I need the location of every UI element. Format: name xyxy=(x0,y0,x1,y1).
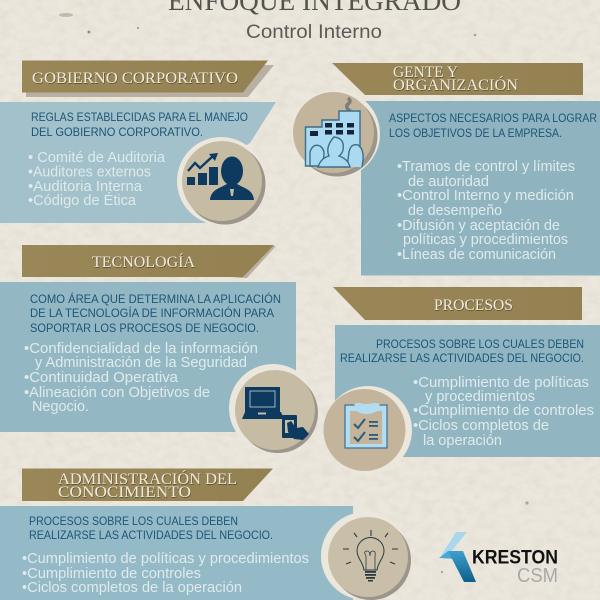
icon: laptop and tablet xyxy=(229,364,318,453)
panel background xyxy=(0,506,353,600)
intro text: LOS OBJETIVOS DE LA EMPRESA. xyxy=(389,126,562,140)
bullet list xyxy=(28,149,166,209)
logo wordmark: KRESTON xyxy=(472,546,558,568)
icon: checklist clipboard xyxy=(324,386,412,474)
bullet list: y Administración de la Seguridad xyxy=(35,354,247,371)
intro text xyxy=(340,337,584,365)
bullet list: •Líneas de comunicación xyxy=(397,246,556,263)
heading: ORGANIZACIÓN xyxy=(393,77,518,94)
bullet list: •Alineación con Objetivos de xyxy=(24,384,210,401)
heading: GENTE Y xyxy=(393,64,458,81)
bullet list: políticas y procedimientos xyxy=(403,231,568,248)
intro text: PROCESOS SOBRE LOS CUALES DEBEN xyxy=(29,514,238,528)
bullet list xyxy=(22,550,309,596)
intro text: REALIZARSE LAS ACTIVIDADES DEL NEGOCIO. xyxy=(29,528,273,542)
banner shadow xyxy=(26,246,276,278)
panel background xyxy=(0,102,276,223)
bullet list: •Auditores externos xyxy=(28,164,151,180)
bullet list: •Confidencialidad de la información xyxy=(24,340,258,357)
panel background xyxy=(335,325,600,457)
heading: PROCESOS xyxy=(434,297,513,314)
panel: procesos xyxy=(324,287,600,474)
intro text: REGLAS ESTABLECIDAS PARA EL MANEJO xyxy=(31,110,248,124)
banner xyxy=(332,63,583,95)
bullet list: •Auditoria Interna xyxy=(28,178,143,195)
logo: Kreston CSM xyxy=(439,532,558,587)
icon: chart and executive xyxy=(177,137,266,225)
logo mark xyxy=(439,532,476,582)
heading: TECNOLOGÍA xyxy=(92,254,196,271)
intro text: DE LA TECNOLOGÍA DE INFORMACIÓN PARA xyxy=(30,305,274,320)
intro text xyxy=(29,514,273,542)
bullet list: •Control Interno y medición xyxy=(397,187,574,204)
bullet list: •Continuidad Operativa xyxy=(24,369,179,386)
subtitle: Control Interno xyxy=(246,22,382,43)
panel: gente y organizacion xyxy=(292,63,600,276)
bullet list: •Ciclos completos de xyxy=(413,417,549,434)
heading xyxy=(393,64,518,94)
bullet list: Negocio. xyxy=(32,398,89,415)
heading: CONOCIMIENTO xyxy=(58,484,191,501)
banner xyxy=(22,468,273,501)
bullet list: •Código de Ética xyxy=(28,192,137,209)
bullet list: •Cumplimiento de controles xyxy=(413,402,594,419)
intro text: SOPORTAR LOS PROCESOS DE NEGOCIO. xyxy=(30,321,259,335)
banner xyxy=(22,245,274,277)
bullet list: de autoridad xyxy=(408,173,489,190)
bullet list: •Ciclos completos de la operación xyxy=(22,579,242,596)
bullet list: •Cumplimiento de políticas y procedimientos xyxy=(22,550,309,567)
banner shadow xyxy=(26,65,274,97)
intro text: DEL GOBIERNO CORPORATIVO. xyxy=(31,125,203,139)
bullet list xyxy=(397,158,575,263)
bullet list: de desempeño xyxy=(408,202,502,219)
bullet list: la operación xyxy=(423,432,502,449)
heading: ADMINISTRACIÓN DEL xyxy=(58,471,237,488)
bullet list xyxy=(413,374,594,449)
icon: building and people xyxy=(292,90,380,178)
bullet list: •Cumplimiento de políticas xyxy=(413,374,589,391)
heading xyxy=(58,471,237,501)
panel: tecnologia xyxy=(0,245,318,453)
bullet list xyxy=(24,340,258,415)
intro text xyxy=(31,110,248,139)
bullet list: •Cumplimiento de controles xyxy=(22,565,201,582)
icon: light bulb xyxy=(321,512,411,600)
panel background xyxy=(0,282,296,432)
panel background xyxy=(361,101,600,276)
title xyxy=(168,0,461,43)
bullet list: • Comité de Auditoria xyxy=(28,149,166,166)
heading: GOBIERNO CORPORATIVO xyxy=(32,70,238,87)
logo subtext: CSM xyxy=(517,565,558,587)
banner xyxy=(22,60,268,92)
intro text xyxy=(389,111,597,140)
intro text xyxy=(30,291,281,335)
bullet list: •Difusión y aceptación de xyxy=(397,217,560,234)
intro text: COMO ÁREA QUE DETERMINA LA APLICACIÓN xyxy=(30,291,281,306)
banner xyxy=(333,287,582,320)
bullet list: y procedimientos xyxy=(425,388,535,405)
bullet list: •Tramos de control y límites xyxy=(397,158,575,175)
panel: administracion del conocimiento xyxy=(0,468,411,600)
panel: gobierno corporativo xyxy=(0,60,276,225)
